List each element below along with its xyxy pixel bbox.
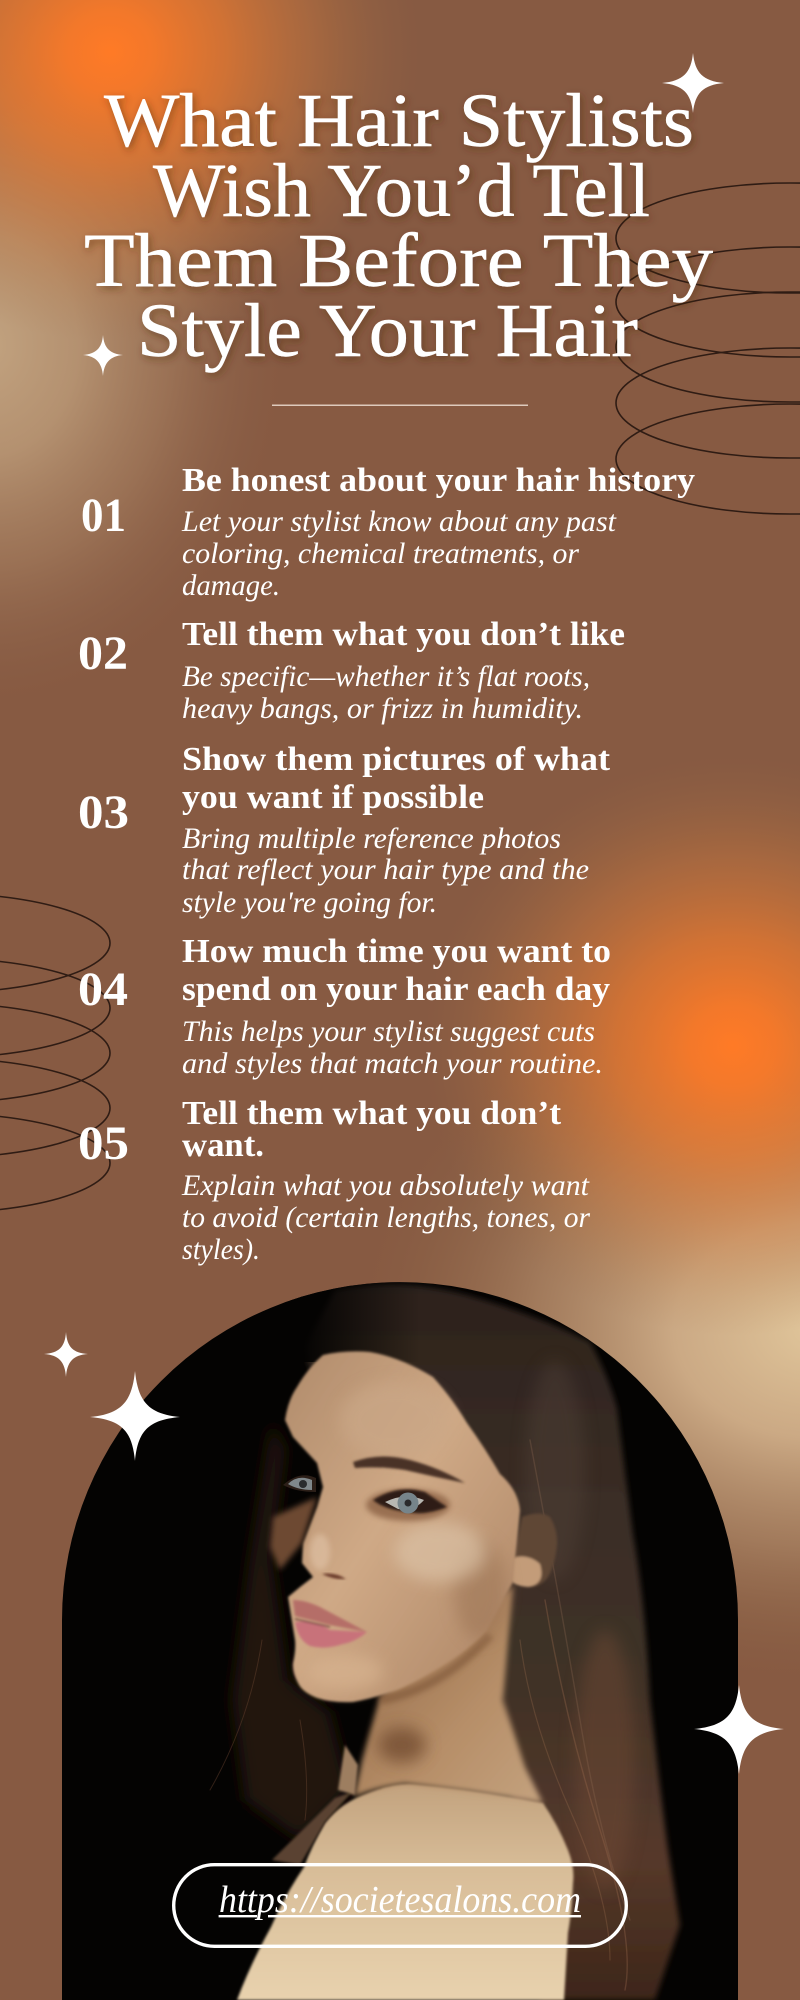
description 01: damage. — [182, 569, 280, 602]
decorative rings: top right — [616, 183, 800, 514]
description 04 — [182, 1015, 603, 1080]
heading 05: want. — [182, 1127, 264, 1164]
lips — [293, 1600, 367, 1648]
website link text: https://societesalons.com — [219, 1879, 581, 1921]
left hair strands — [232, 1420, 350, 1840]
neck — [338, 1586, 543, 1803]
description 01 — [181, 505, 617, 602]
title: Style Your Hair — [137, 289, 638, 373]
description 03: style you're going for. — [182, 886, 437, 919]
left eye — [283, 1475, 316, 1492]
number 03: 03 — [78, 786, 129, 839]
number 01: 01 — [81, 489, 126, 542]
description 05: Explain what you absolutely want — [181, 1169, 590, 1202]
heading 03: you want if possible — [182, 779, 484, 816]
title: Them Before They — [84, 219, 713, 303]
decorative rings: middle left — [0, 893, 110, 1213]
right eye — [373, 1489, 447, 1514]
hair — [210, 1282, 680, 2000]
number 04: 04 — [78, 963, 128, 1016]
eye shadow area — [366, 1489, 450, 1521]
heading 05 — [182, 1095, 562, 1164]
icon: sparkle left of title — [83, 335, 123, 376]
description 01: coloring, chemical treatments, or — [182, 537, 579, 570]
icon: large sparkle on arch left — [90, 1371, 180, 1461]
item 01 — [81, 462, 695, 602]
number 05: 05 — [78, 1117, 129, 1170]
heading 04: How much time you want to — [182, 933, 611, 970]
divider — [272, 405, 528, 406]
description 03: that reflect your hair type and the — [182, 853, 589, 886]
description 02: heavy bangs, or frizz in humidity. — [182, 692, 583, 725]
icon: sparkle top right — [662, 53, 724, 113]
face — [270, 1351, 520, 1702]
photo: woman with long dark hair in arch frame — [62, 1282, 738, 2000]
eyebrow — [353, 1456, 465, 1483]
description 04: This helps your stylist suggest cuts — [182, 1015, 595, 1048]
website link pill — [174, 1865, 626, 1946]
icon: large sparkle on arch right — [694, 1685, 784, 1774]
heading 03 — [182, 741, 611, 816]
nostril — [322, 1574, 346, 1579]
icon: small sparkle beside arch — [44, 1332, 88, 1377]
item 04 — [78, 933, 611, 1080]
heading 02: Tell them what you don’t like — [182, 616, 625, 653]
ear — [510, 1514, 557, 1587]
heading 04 — [182, 933, 611, 1008]
shadowed cheek — [270, 1497, 317, 1570]
description 03 — [182, 822, 589, 919]
heading 01: Be honest about your hair history — [182, 462, 695, 499]
item 05 — [78, 1095, 590, 1266]
description 02 — [182, 660, 590, 725]
description 05 — [181, 1169, 590, 1266]
heading 03: Show them pictures of what — [182, 741, 611, 778]
description 05: styles). — [182, 1233, 260, 1266]
item 03 — [78, 741, 611, 919]
description 02: Be specific—whether it’s flat roots, — [182, 660, 590, 693]
description 01: Let your stylist know about any past — [181, 505, 617, 538]
hair strand over shoulder — [272, 1792, 352, 1865]
title — [84, 79, 713, 373]
heading 05: Tell them what you don’t — [182, 1095, 562, 1132]
hair strand highlights — [210, 1440, 630, 1990]
description 03: Bring multiple reference photos — [182, 822, 561, 855]
shoulder — [237, 1784, 573, 2000]
title: What Hair Stylists — [104, 79, 694, 163]
title: Wish You’d Tell — [153, 149, 650, 233]
heading 04: spend on your hair each day — [182, 971, 610, 1008]
item 02 — [78, 616, 625, 725]
number 02: 02 — [78, 627, 128, 680]
description 05: to avoid (certain lengths, tones, or — [182, 1201, 590, 1234]
description 04: and styles that match your routine. — [182, 1047, 603, 1080]
